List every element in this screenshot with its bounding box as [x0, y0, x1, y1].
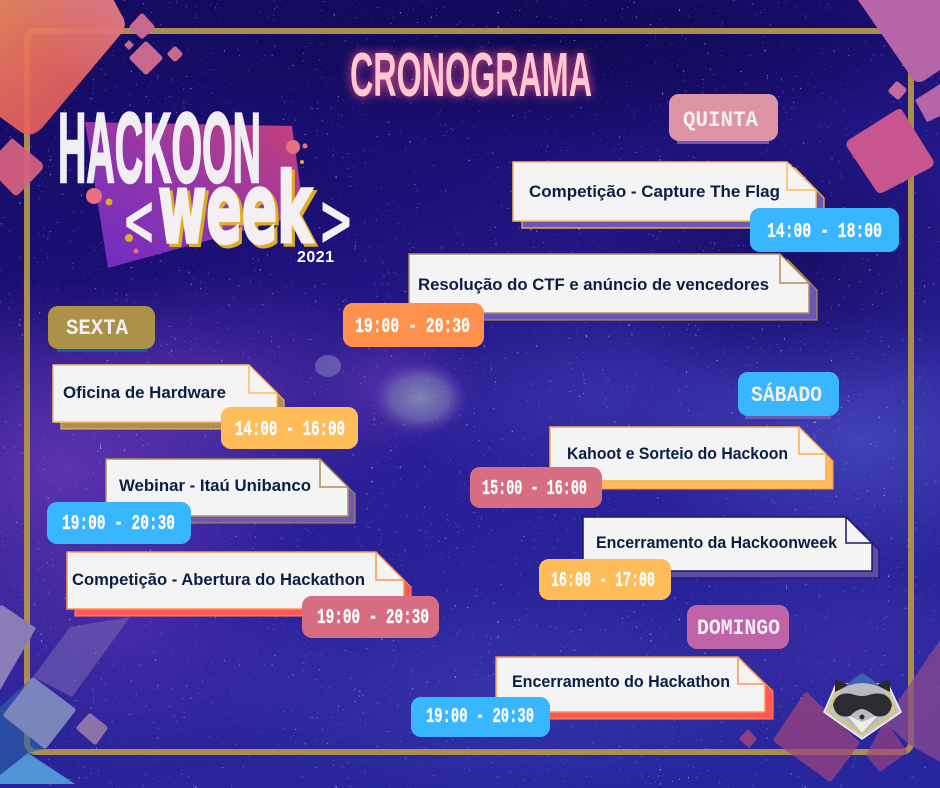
time pill: 16:00 - 17:00 [539, 559, 671, 600]
card: Competição - Capture The Flag: Competição - Capture The Flag [529, 182, 780, 201]
time pill: 15:00 - 16:00 [470, 467, 602, 508]
logo: Hackoon Week 2021: HACKOON [58, 92, 261, 203]
day label: Quinta [669, 94, 778, 144]
shapes: bottom-left translucent [0, 605, 130, 784]
icon: raccoon mascot badge [824, 673, 901, 739]
time pill: 15:00 - 16:00: 15:00 - 16:00 [482, 478, 587, 501]
time pill: 19:00 - 20:30 orange [343, 303, 484, 347]
title: CRONOGRAMA [350, 41, 592, 110]
time pill: 14:00 - 16:00 [221, 407, 358, 449]
day label: Quinta: QUINTA [683, 108, 759, 133]
time pill: 19:00 - 20:30 blue [47, 502, 191, 544]
card: Encerramento do Hackathon: Encerramento do Hackathon [512, 672, 730, 691]
logo: Hackoon Week 2021: > [318, 178, 354, 262]
day label: Sexta [48, 306, 155, 352]
logo: Hackoon Week 2021: week [161, 156, 316, 268]
card: Resolução do CTF [409, 254, 817, 320]
time pill: 19:00 - 20:30 rose: 19:00 - 20:30 [317, 607, 429, 630]
time pill: 19:00 - 20:30 rose [302, 596, 439, 638]
card: Competição - Abertura do Hackathon: Competição - Abertura do Hackathon [72, 570, 365, 589]
card: Oficina de Hardware [53, 365, 284, 429]
logo: Hackoon Week 2021: < [122, 178, 156, 262]
time pill: 19:00 - 20:30 orange: 19:00 - 20:30 [355, 316, 470, 339]
logo: Hackoon Week 2021: week [158, 153, 313, 265]
card: Encerramento do Hackathon [496, 657, 773, 719]
logo: Hackoon Week 2021: 2021 [297, 249, 334, 266]
shapes: bottom-right translucent [739, 640, 940, 779]
card: Encerramento da Hackoonweek [583, 517, 879, 578]
card: Resolução do CTF: Resolução do CTF e anúncio de vencedores [418, 275, 769, 294]
card: Oficina de Hardware: Oficina de Hardware [63, 383, 226, 402]
time pill: 14:00 - 18:00: 14:00 - 18:00 [767, 221, 882, 244]
day label: Sexta: SEXTA [66, 316, 129, 341]
shapes: top-left diamonds [0, 0, 180, 196]
day label: Domingo: DOMINGO [697, 616, 780, 641]
time pill: 19:00 - 20:30 blue: 19:00 - 20:30 [62, 513, 175, 536]
card: Kahoot e Sorteio do Hackoon: Kahoot e Sorteio do Hackoon [567, 444, 788, 463]
time pill: 14:00 - 16:00: 14:00 - 16:00 [235, 419, 345, 442]
time pill: 19:00 - 20:30 blue bottom: 19:00 - 20:30 [426, 706, 534, 729]
card: Encerramento da Hackoonweek: Encerramento da Hackoonweek [596, 533, 838, 552]
day label: Sábado: SÁBADO [751, 382, 822, 408]
time pill: 16:00 - 17:00: 16:00 - 17:00 [551, 570, 655, 593]
day label: Sábado [738, 372, 839, 419]
card: Webinar - Itaú Unibanco [106, 459, 355, 523]
day label: Domingo [687, 605, 789, 649]
card: Competição - Capture The Flag [513, 162, 824, 228]
card: Webinar - Itaú Unibanco: Webinar - Itaú Unibanco [119, 476, 311, 495]
card: Kahoot e Sorteio do Hackoon [550, 427, 833, 489]
logo: Hackoon Week 2021 [58, 92, 354, 268]
shapes: top-right diamonds [846, 0, 940, 193]
title: CRONOGRAMA [350, 41, 592, 110]
card: Competição - Abertura do Hackathon [67, 552, 411, 616]
title [350, 41, 592, 110]
time pill: 19:00 - 20:30 blue bottom [411, 697, 550, 737]
time pill: 14:00 - 18:00 [750, 208, 899, 252]
